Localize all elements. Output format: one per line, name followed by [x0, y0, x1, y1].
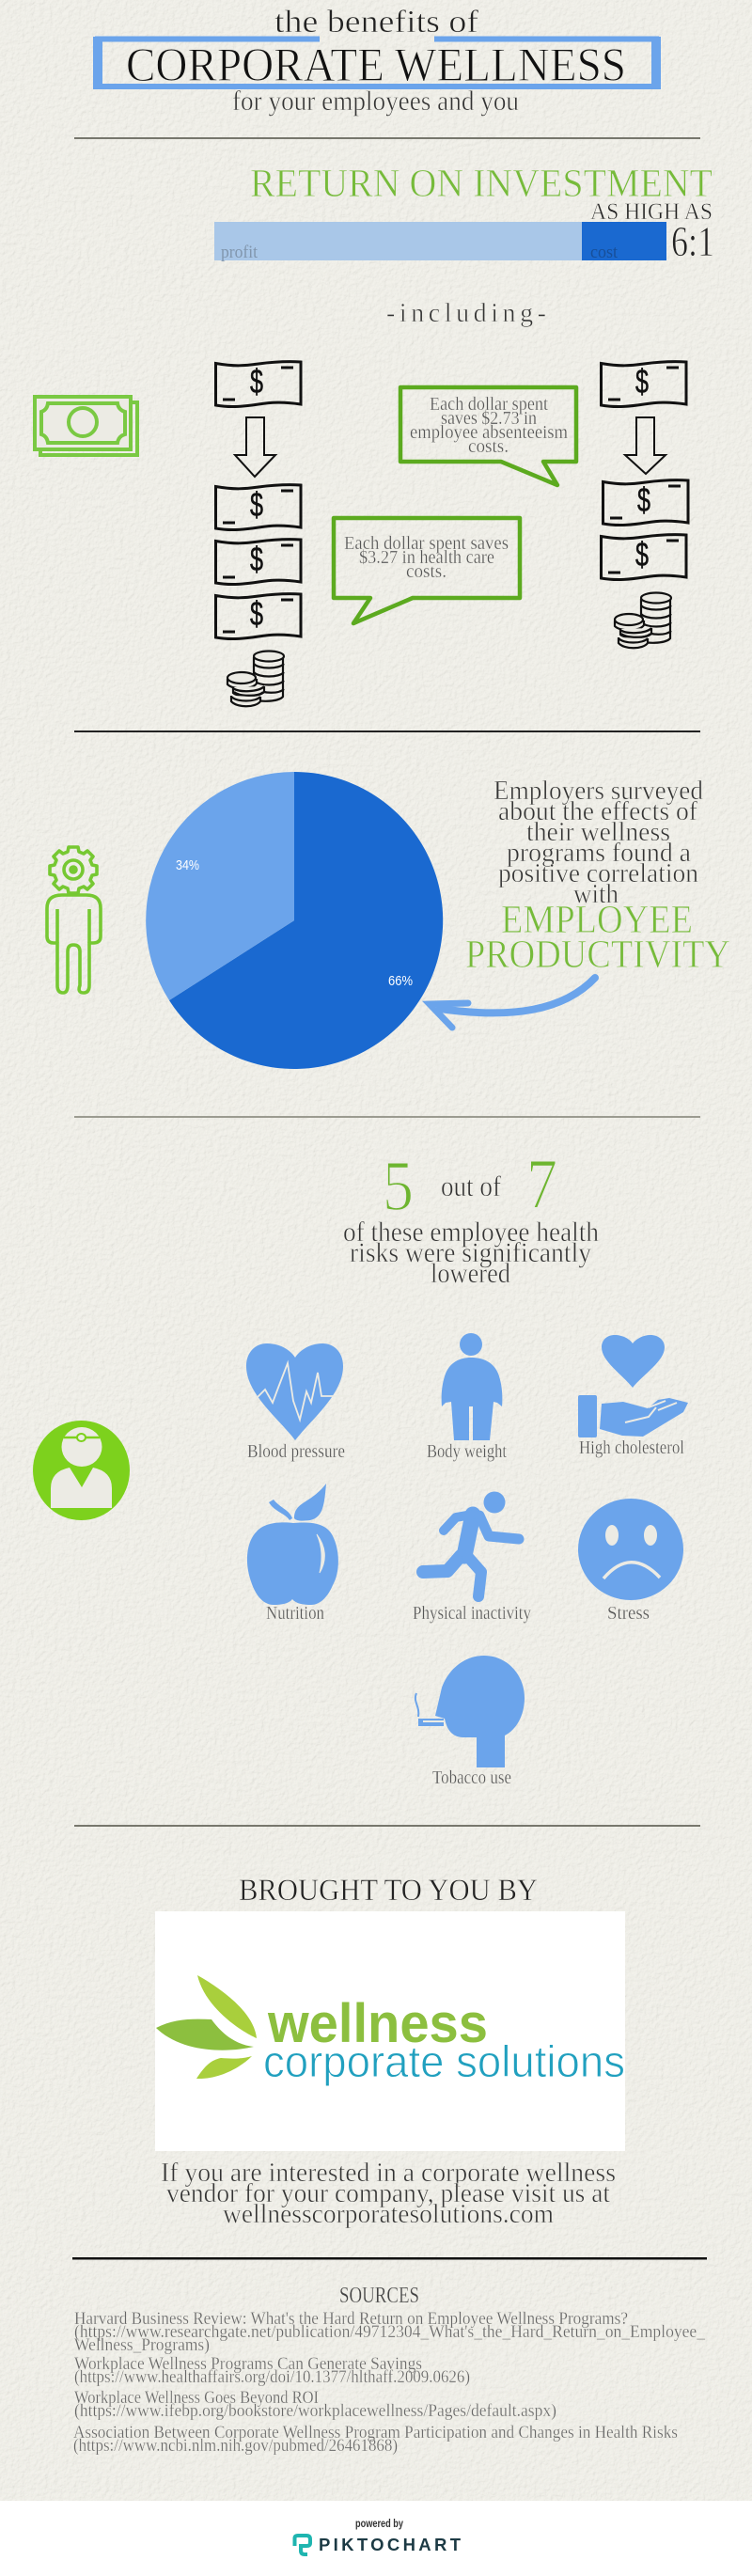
call to action text: If you are interested in a corporate wellness: [161, 2158, 616, 2188]
arrow: curved to pie: [430, 978, 595, 1028]
logo leaves: [156, 1975, 257, 2079]
label: blood pressure: Blood pressure: [247, 1441, 345, 1462]
callout: health care: $3.27 in health care: [359, 547, 494, 568]
label: physical inactivity: Physical inactivity: [413, 1603, 531, 1624]
cost bar: [582, 222, 666, 262]
source list: Wellness_Programs): [74, 2335, 210, 2355]
source list: Workplace Wellness Programs Can Generate Savings: [74, 2354, 422, 2374]
heading: employee productivity: EMPLOYEE: [501, 899, 693, 942]
callout: health care: Each dollar spent saves: [344, 533, 509, 554]
description: [343, 1217, 599, 1289]
right stack: absenteeism savings: [602, 362, 688, 648]
icon: apple nutrition: [247, 1484, 338, 1605]
callout: absenteeism: [400, 387, 576, 485]
icon: person with gear head: [47, 847, 101, 993]
icon: high cholesterol: [578, 1335, 688, 1437]
source list: [73, 2309, 705, 2456]
icon: smoker tobacco use: [415, 1656, 525, 1767]
call to action text: [161, 2158, 616, 2229]
icon: body weight: [442, 1333, 502, 1440]
icon: bill: [216, 594, 301, 639]
left stack: health care savings: [216, 362, 301, 706]
icon: green money: [35, 397, 137, 455]
text: employers surveyed: Employers surveyed: [494, 776, 703, 806]
big number 7: 7: [526, 1145, 557, 1224]
piktochart wordmark: PIKTOCHART: [319, 2535, 462, 2554]
source list: (https://www.healthaffairs.org/doi/10.1377/hlthaff.2009.0626): [74, 2367, 470, 2387]
description: of these employee health: [343, 1217, 599, 1248]
callout: absenteeism: employee absenteeism: [410, 422, 568, 443]
heading: return on investment: RETURN ON INVESTMENT: [250, 163, 713, 206]
text: employers surveyed: with: [573, 879, 619, 909]
text: employers surveyed: programs found a: [507, 838, 691, 868]
icon: runner physical inactivity: [423, 1491, 519, 1596]
ratio: 6:1: [671, 217, 714, 265]
icon: coins: [227, 651, 284, 706]
call to action text: vendor for your company, please visit us at: [166, 2178, 610, 2208]
logo wordmark: corporate solutions: corporate solutions: [263, 2036, 625, 2086]
callout: health care: [334, 518, 520, 623]
source list: Association Between Corporate Wellness Program Participation and Changes in Health Risks: [73, 2423, 678, 2442]
cost bar: cost: [590, 243, 619, 262]
callout: absenteeism: costs.: [468, 436, 509, 457]
arrow down: [625, 417, 666, 474]
text: employers surveyed: their wellness: [526, 817, 670, 847]
panel: sources: [73, 2284, 705, 2456]
label: high cholesterol: High cholesterol: [579, 1437, 684, 1458]
icon: bill: [603, 480, 688, 526]
heading: sources: SOURCES: [339, 2284, 419, 2308]
icon: bill: [602, 362, 686, 407]
including label: -including-: [386, 299, 546, 328]
label: tobacco use: Tobacco use: [432, 1767, 511, 1788]
icon: bill: [216, 362, 301, 407]
callout: health care: costs.: [406, 561, 446, 582]
title frame: [98, 39, 656, 86]
icon: bill: [216, 485, 301, 530]
title: the benefits of: the benefits of: [274, 5, 479, 39]
icon: coins: [615, 592, 671, 648]
source list: Harvard Business Review: What's the Hard Return on Employee Wellness Programs?: [74, 2309, 628, 2329]
icon: sad face stress: [578, 1499, 683, 1600]
label: nutrition: Nutrition: [266, 1603, 324, 1624]
heading: employee productivity: PRODUCTIVITY: [465, 934, 730, 977]
icon: piktochart logo: [295, 2536, 310, 2554]
text: employers surveyed: [494, 776, 703, 909]
icon: bill: [216, 540, 301, 585]
icon: doctor: [33, 1421, 130, 1520]
description: risks were significantly: [350, 1237, 591, 1268]
logo wordmark: wellness: wellness: [267, 1993, 488, 2054]
slice: 34 percent: [146, 772, 294, 1000]
powered by: powered by: [355, 2517, 403, 2530]
source list: Workplace Wellness Goes Beyond ROI: [74, 2388, 319, 2408]
footer: [0, 2501, 752, 2576]
source list: (https://www.ifebp.org/bookstore/workplacewellness/Pages/default.aspx): [74, 2401, 556, 2421]
callout: absenteeism: Each dollar spent: [430, 394, 548, 415]
source list: (https://www.researchgate.net/publication/49712304_What's_the_Hard_Return_on_Employee_: [74, 2322, 705, 2342]
profit bar: [214, 222, 582, 262]
callout: absenteeism: saves $2.73 in: [441, 408, 537, 429]
header: [98, 5, 656, 117]
description: lowered: [431, 1258, 510, 1289]
logo panel: [155, 1911, 625, 2151]
call to action text: wellnesscorporatesolutions.com: [223, 2199, 554, 2229]
out of: out of: [441, 1170, 502, 1202]
icon: blood pressure heart: [246, 1343, 350, 1440]
title: corporate wellness: CORPORATE WELLNESS: [126, 39, 626, 92]
text: employers surveyed: positive correlation: [498, 858, 698, 888]
panel: return on investment: [214, 163, 714, 265]
as high as label: AS HIGH AS: [590, 199, 713, 225]
heading: brought to you by: BROUGHT TO YOU BY: [239, 1874, 538, 1908]
text: employers surveyed: about the effects of: [498, 796, 697, 826]
arrow down: [235, 417, 275, 477]
label: body weight: Body weight: [427, 1441, 507, 1462]
heading: employee productivity: [465, 899, 730, 977]
pie chart: [146, 772, 443, 1069]
label: 34 percent: 34%: [176, 857, 199, 873]
source list: (https://www.ncbi.nlm.nih.gov/pubmed/26461868): [73, 2436, 398, 2456]
icon: bill: [602, 535, 686, 580]
subtitle: for your employees and you: [232, 86, 519, 117]
slice: 66 percent: [169, 772, 443, 1069]
label: 66 percent: 66%: [388, 973, 413, 989]
big number 5: 5: [383, 1147, 414, 1226]
panel: health risks heading: [343, 1145, 599, 1289]
label: stress: Stress: [607, 1603, 650, 1624]
profit bar: profit: [221, 243, 258, 262]
